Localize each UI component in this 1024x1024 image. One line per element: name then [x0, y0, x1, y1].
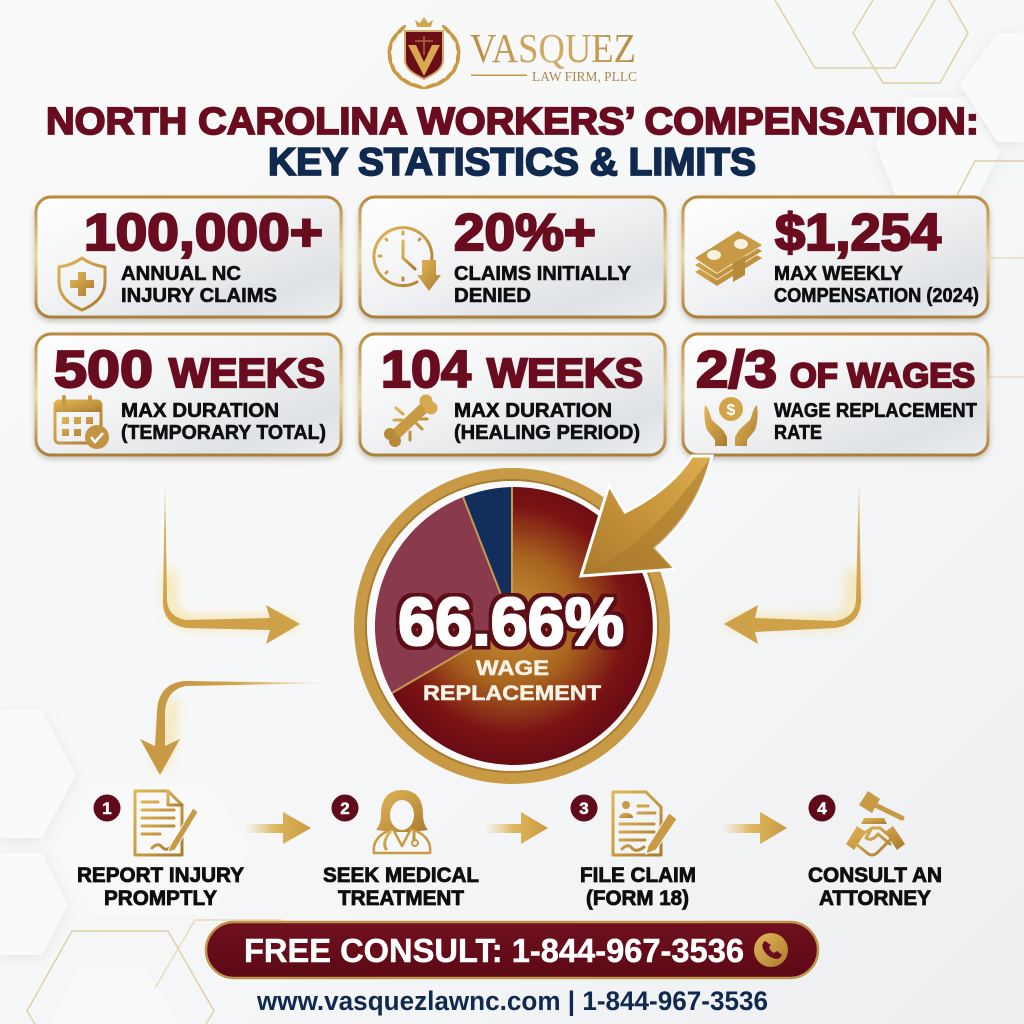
icon: laurel crest — [387, 17, 461, 90]
logo — [387, 17, 637, 90]
title line 2: KEY STATISTICS & LIMITS — [268, 141, 756, 184]
panel: wage replacement rate: RATE — [774, 422, 822, 444]
icon: doctor — [374, 790, 430, 853]
step 3 label: FILE CLAIM — [580, 864, 696, 887]
call to action pill — [206, 922, 818, 978]
stat: 100,000+: 100,000+ — [84, 204, 323, 262]
step 4 badge: 4 — [817, 799, 827, 818]
step 3 badge: 3 — [579, 799, 589, 818]
arrow: step 3 to 4 — [722, 812, 787, 844]
pie caption: WAGE — [476, 657, 549, 680]
label: MAX WEEKLY — [774, 263, 904, 285]
arrow: right flow into pie — [724, 473, 861, 644]
panel: 104 weeks — [360, 334, 665, 455]
panel: 500 weeks: (TEMPORARY TOTAL) — [121, 422, 326, 444]
step 1: report injury: PROMPTLY — [104, 887, 217, 910]
title line 1: NORTH CAROLINA WORKERS’ COMPENSATION: — [46, 101, 979, 143]
step 2 badge — [332, 794, 358, 822]
chart: wage replacement pie — [360, 474, 664, 778]
step 4: consult an attorney — [808, 791, 942, 910]
icon: phone — [754, 933, 788, 967]
website and phone: www.vasquezlawnc.com | 1-844-967-3536 — [256, 986, 768, 1016]
step 1 badge: 1 — [102, 799, 112, 818]
title — [46, 101, 979, 184]
pie slice: navy — [463, 487, 512, 623]
panel: max weekly compensation — [683, 197, 988, 317]
panel: wage replacement rate: OF WAGES — [790, 357, 975, 395]
stat: 104 weeks: 104 — [381, 341, 471, 399]
icon: claim form with pencil — [613, 792, 677, 855]
step 4: consult an attorney: ATTORNEY — [819, 887, 931, 910]
icon: document with pen — [135, 791, 198, 855]
label: WAGE REPLACEMENT — [774, 400, 977, 422]
icon: broken bone — [384, 394, 438, 447]
step 1 label: REPORT INJURY — [77, 864, 244, 887]
panel: max weekly compensation: COMPENSATION (2024) — [774, 285, 979, 307]
stat: 500 weeks: 500 — [54, 341, 153, 399]
step 1 badge — [94, 794, 120, 822]
panel: 104 weeks: WEEKS — [487, 350, 643, 396]
arrow: wage panel to pie — [581, 456, 712, 576]
pie slice: main 66.66% — [392, 487, 653, 765]
pie slice: rose — [375, 497, 512, 693]
step 2 badge: 2 — [340, 799, 350, 818]
icon: clock with down arrow — [374, 228, 441, 291]
step 2 label: SEEK MEDICAL — [323, 864, 479, 887]
step 3: file claim — [570, 792, 696, 910]
stat: 2/3 of wages: 2/3 — [696, 341, 777, 399]
panel: claims denied: DENIED — [454, 285, 531, 307]
icon: shield with cross — [59, 258, 105, 310]
panel: wage replacement rate — [683, 334, 988, 455]
step 2: seek medical treatment — [323, 790, 479, 910]
label: MAX DURATION — [454, 400, 612, 422]
arrow: step 2 to 3 — [485, 812, 548, 844]
pie value: 66.66% — [398, 584, 624, 660]
chart: wage replacement pie: REPLACEMENT — [423, 682, 601, 705]
label: MAX DURATION — [121, 400, 279, 422]
step 3: file claim: (FORM 18) — [586, 887, 689, 910]
panel: annual claims — [36, 197, 341, 317]
stat: $1,254: $1,254 — [775, 204, 941, 262]
icon: hands holding coin — [704, 397, 758, 446]
icon: gavel and handshake — [846, 791, 905, 855]
label: ANNUAL NC — [121, 263, 241, 285]
icon: calendar with check — [55, 397, 109, 449]
logo subtitle: LAW FIRM, PLLC — [532, 69, 637, 84]
panel: 104 weeks: (HEALING PERIOD) — [454, 422, 640, 444]
arrow: step 1 to 2 — [245, 812, 311, 844]
panel: 500 weeks — [36, 334, 341, 455]
stat: 20%+: 20%+ — [454, 204, 596, 262]
logo wordmark: VASQUEZ — [470, 25, 636, 71]
icon: stack of money — [695, 231, 762, 286]
arrow: pie to steps — [140, 681, 335, 775]
panel: claims denied — [360, 197, 665, 317]
step 1: report injury — [77, 791, 244, 910]
cta text: FREE CONSULT: 1-844-967-3536 — [244, 932, 744, 969]
step 4 label: CONSULT AN — [808, 864, 942, 887]
step 2: seek medical treatment: TREATMENT — [338, 887, 464, 910]
icon: hands holding coin: $ — [727, 402, 736, 419]
panel: annual claims: INJURY CLAIMS — [121, 285, 277, 307]
panel: 500 weeks: WEEKS — [169, 350, 325, 396]
label: CLAIMS INITIALLY — [454, 263, 632, 285]
arrow: left flow into pie — [163, 473, 300, 644]
